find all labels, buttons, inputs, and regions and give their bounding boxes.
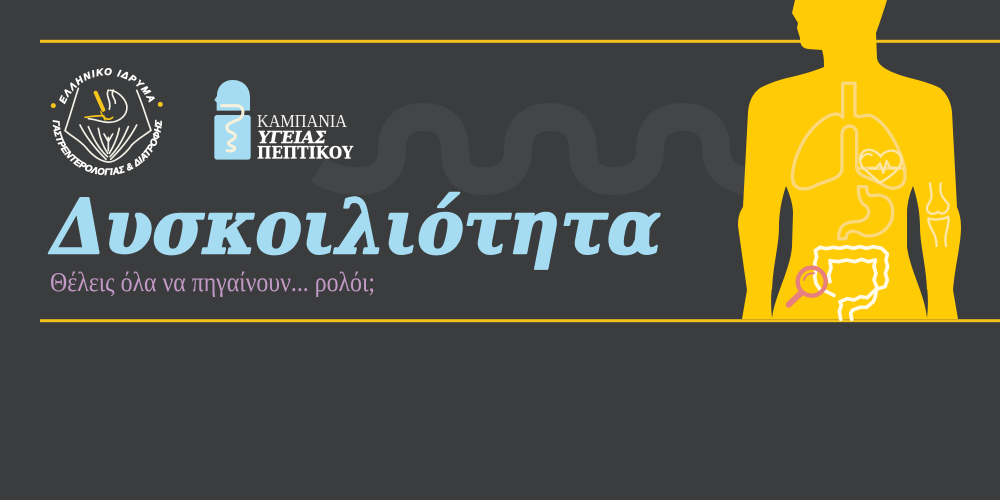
knee joint <box>927 183 949 246</box>
campaign name line 3: ΠΕΠΤΙΚΟΥ <box>257 144 353 162</box>
wheat <box>85 93 113 120</box>
logo dots <box>51 102 163 108</box>
magnifying glass <box>789 268 826 305</box>
title: Δυσκοιλιότητα <box>44 183 671 271</box>
campaign name line 1: ΚΑΜΠΑΝΙΑ <box>257 111 347 131</box>
campaign icon <box>214 80 251 160</box>
subtitle: Θέλεις όλα να πηγαίνουν... ρολόι; <box>50 267 375 297</box>
foundation logo <box>50 68 163 176</box>
foundation name bottom: ΓΑΣΤΡΕΝΤΕΡΟΛΟΓΙΑΣ & ΔΙΑΤΡΟΦΗΣ <box>52 120 162 176</box>
background intestine wave <box>318 117 750 182</box>
human body illustration <box>738 0 961 319</box>
bottom yellow rule <box>40 319 1000 322</box>
top yellow rule <box>40 40 1000 43</box>
campaign name line 2: ΥΓΕΙΑΣ <box>255 127 328 147</box>
foundation name top: ΕΛΛΗΝΙΚΟ ΙΔΡΥΜΑ <box>59 68 155 104</box>
campaign logo <box>214 80 353 162</box>
hands <box>65 88 151 162</box>
lungs <box>792 83 905 189</box>
heart <box>860 150 901 183</box>
large intestine <box>815 247 888 319</box>
stomach <box>839 187 893 239</box>
body silhouette <box>738 0 961 319</box>
